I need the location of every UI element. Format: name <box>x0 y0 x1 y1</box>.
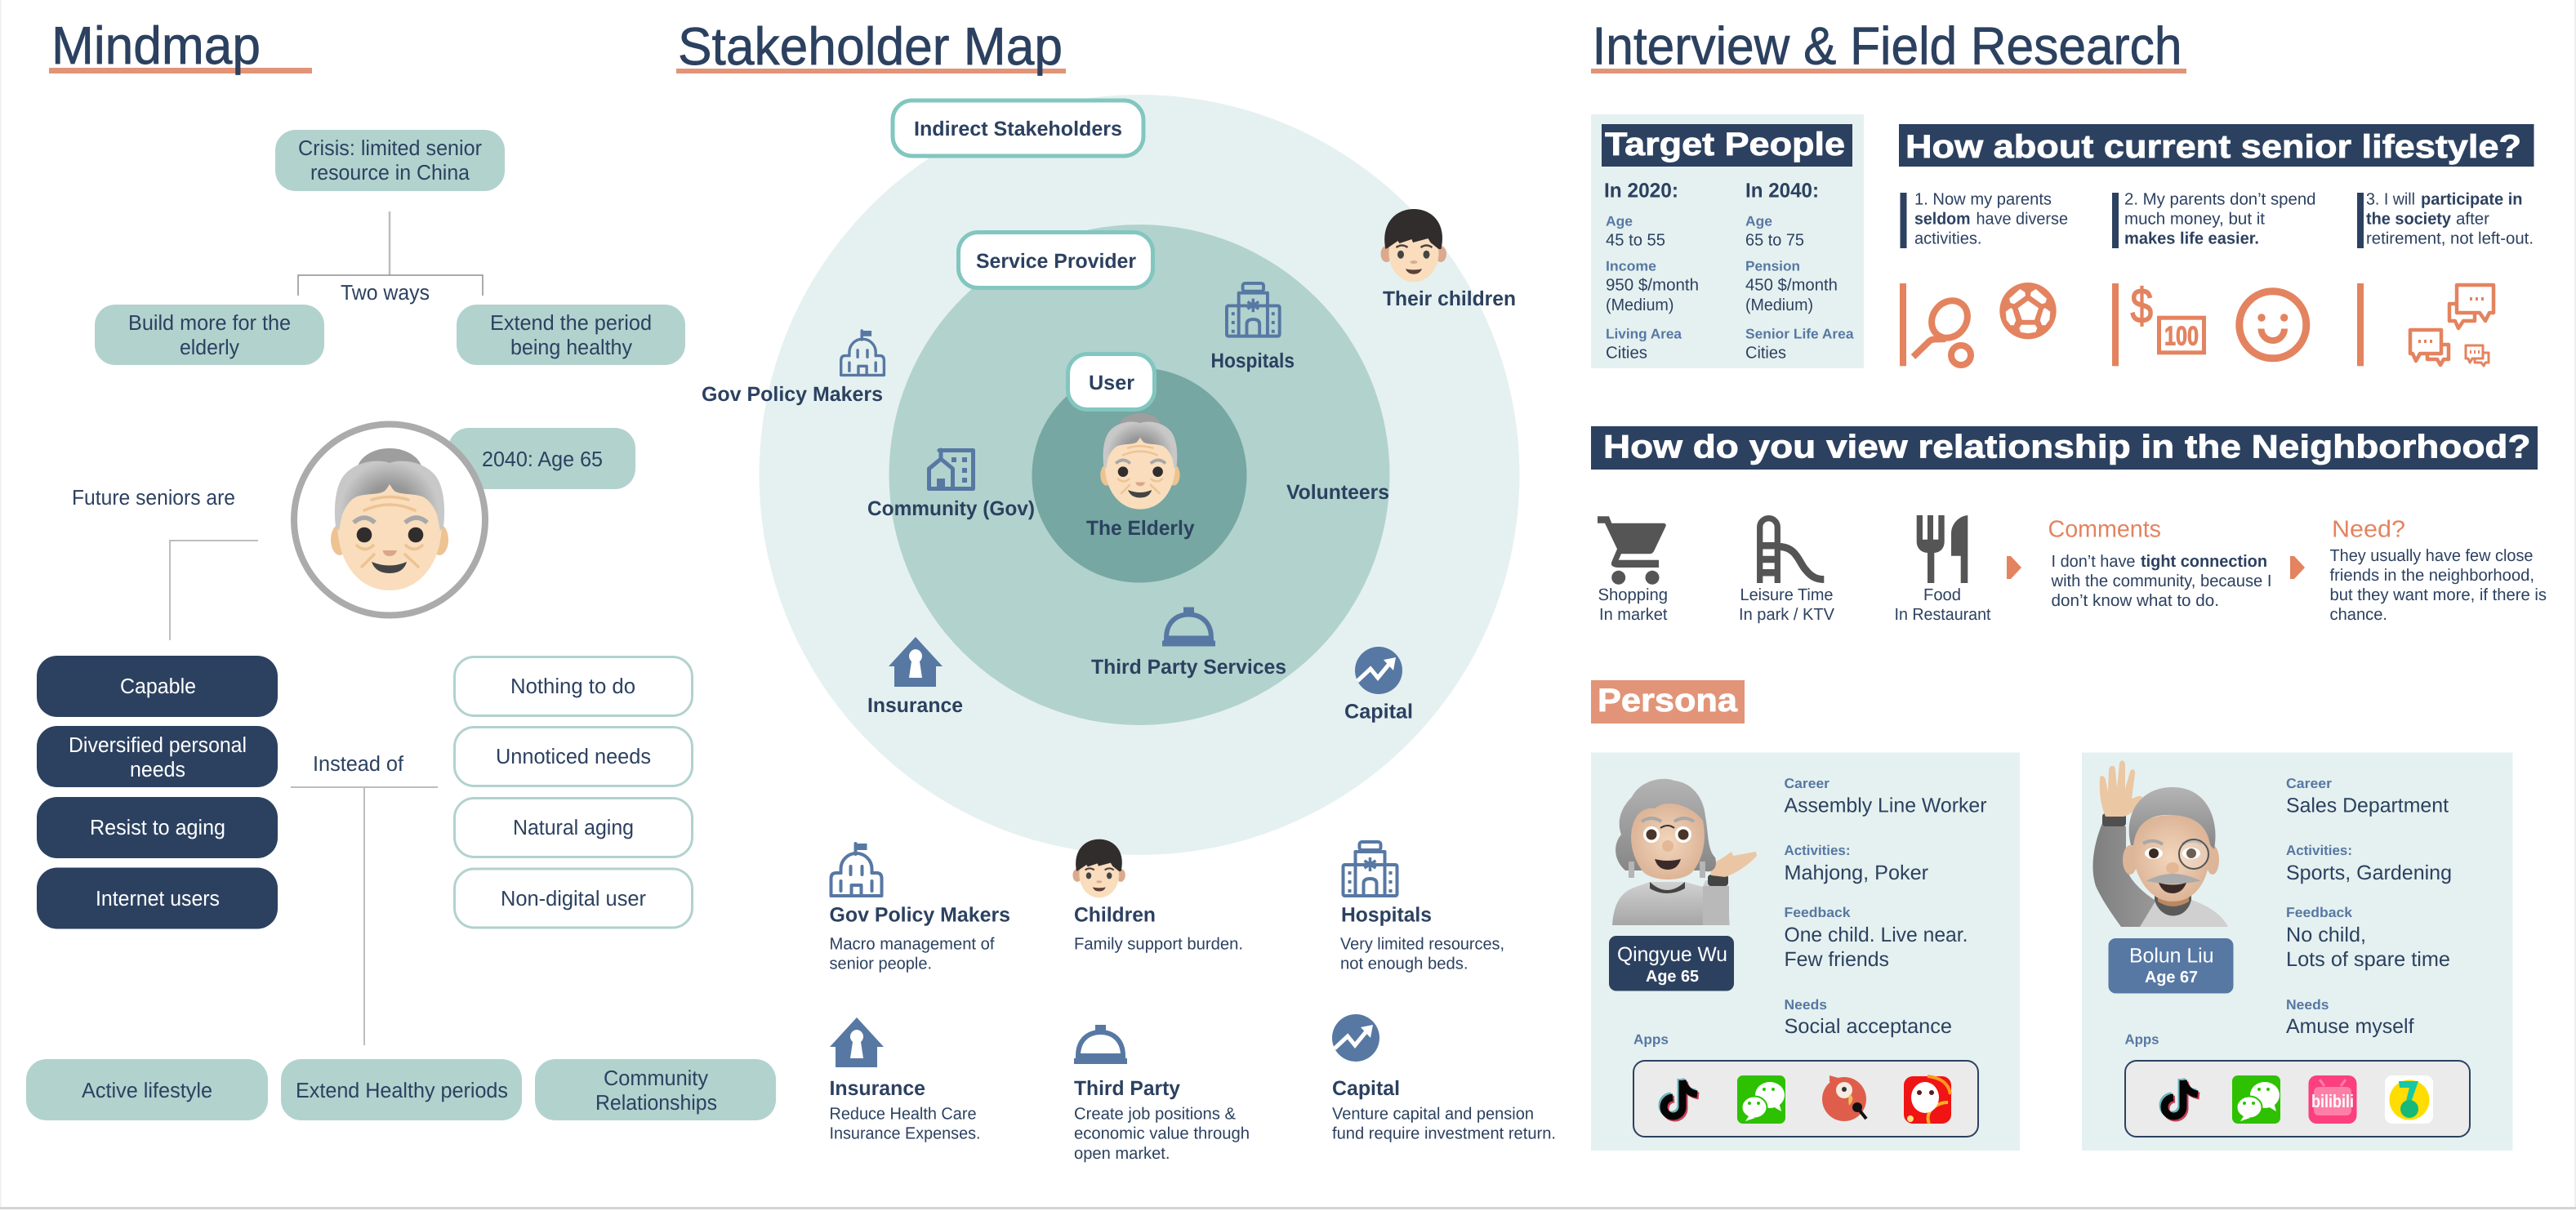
header: current senior lifestyle: How about current senior lifestyle? <box>1905 129 2521 165</box>
legend: capital <box>1332 1014 1556 1143</box>
stereotype: non-digital user: Non-digital user <box>501 886 646 910</box>
node: active lifestyle: Active lifestyle <box>82 1078 212 1102</box>
profile details: Career <box>1784 776 1829 791</box>
need block: but they want more, if there is <box>2329 585 2547 604</box>
trait: internet users <box>37 867 278 929</box>
comments block: Comments <box>2048 516 2161 542</box>
icon: singing app <box>1822 1075 1866 1121</box>
trait: diversified needs <box>37 726 278 787</box>
persona card: Bolun Liu <box>2082 753 2512 1151</box>
stereotype: unnoticed needs: Unnoticed needs <box>496 744 651 768</box>
quote 3: participate in <box>2421 189 2522 209</box>
column: in 2040: 450 $/month <box>1745 276 1838 294</box>
node: extend the period: Extend the period <box>490 310 652 335</box>
legend: insurance: Reduce Health Care <box>830 1104 977 1124</box>
profile details: Lots of spare time <box>2286 948 2450 971</box>
profile details <box>2286 776 2452 1038</box>
legend: hospitals: not enough beds. <box>1340 954 1468 973</box>
legend: children: Children <box>1074 903 1156 926</box>
column: in 2040: Pension <box>1745 258 1800 274</box>
profile details: Feedback <box>2286 905 2353 920</box>
legend: gov policy makers: senior people. <box>830 954 932 973</box>
node: crisis: resource in China <box>310 160 470 185</box>
need block: They usually have few close <box>2329 546 2534 565</box>
comments block: I don’t have <box>2052 552 2135 571</box>
quote 3 <box>2357 189 2534 248</box>
quote 2: much money, but it <box>2124 209 2265 229</box>
activity: shopping: In market <box>1599 605 1668 624</box>
stereotype: natural aging <box>454 799 693 857</box>
profile details: Feedback <box>1784 905 1851 920</box>
quote 2 <box>2112 189 2316 248</box>
activity: food: Food <box>1923 585 1961 604</box>
connector: two ways bracket <box>298 211 483 296</box>
profile details: Social acceptance <box>1784 1015 1952 1038</box>
legend: third party: Third Party <box>1074 1077 1180 1100</box>
column: in 2020: Age <box>1606 214 1633 229</box>
legend: gov policy makers: Macro management of <box>830 934 995 954</box>
header: persona <box>1591 680 1745 723</box>
node: extend healthy periods: Extend Healthy periods <box>296 1078 508 1102</box>
node: build more: elderly <box>180 335 239 359</box>
label: future seniors: Future seniors are <box>72 485 235 510</box>
profile details: Assembly Line Worker <box>1784 794 1986 817</box>
node: extend healthy periods <box>281 1059 522 1120</box>
name tag: Bolun Liu: Bolun Liu <box>2129 944 2213 967</box>
icons: money and smile: $ <box>2130 278 2153 333</box>
icons: racket and soccer ball <box>1900 283 2057 366</box>
need block: chance. <box>2329 605 2387 624</box>
tag: user: User <box>1089 372 1134 394</box>
column: in 2020: 950 $/month <box>1606 276 1699 294</box>
profile details: Sales Department <box>2286 794 2449 817</box>
column: in 2020: Living Area <box>1606 327 1682 341</box>
legend: insurance: Insurance Expenses. <box>830 1124 980 1143</box>
node: community relationships: Relationships <box>595 1090 717 1115</box>
profile details: Needs <box>2286 997 2329 1013</box>
profile details: Needs <box>1784 997 1827 1013</box>
user: the elderly <box>1086 413 1195 540</box>
tag: indirect stakeholders: Indirect Stakeholders <box>914 118 1122 140</box>
node: build more: Build more for the <box>128 310 291 335</box>
column: in 2040: 65 to 75 <box>1745 230 1804 250</box>
node: active lifestyle <box>26 1059 268 1120</box>
icon: bilibili <box>2308 1075 2357 1124</box>
stakeholder: capital: Capital <box>1344 701 1413 723</box>
heading: stakeholder map: Stakeholder Map <box>678 16 1063 76</box>
profile details: One child. Live near. <box>1784 924 1968 946</box>
legend: capital: Capital <box>1332 1077 1400 1100</box>
quote 2: makes life easier. <box>2124 229 2259 248</box>
node: extend the period <box>457 305 685 365</box>
trait: diversified needs: Diversified personal <box>69 732 247 757</box>
column: in 2040: (Medium) <box>1745 296 1813 314</box>
profile details: Mahjong, Poker <box>1784 862 1928 884</box>
list: stereotypes <box>454 657 693 928</box>
activity: leisure <box>1739 519 1834 624</box>
stakeholder: gov policy makers <box>702 331 884 406</box>
trait: capable: Capable <box>120 674 196 698</box>
node: crisis: Crisis: limited senior <box>298 136 482 160</box>
icon: bilibili: bilibili <box>2311 1091 2354 1111</box>
need block: friends in the neighborhood, <box>2329 566 2534 585</box>
panel: stakeholder map <box>676 16 1556 1163</box>
stakeholder: third party services <box>1091 608 1286 679</box>
trait: internet users: Internet users <box>96 886 220 910</box>
user: the elderly: The Elderly <box>1086 517 1195 540</box>
activity: food <box>1895 515 1991 624</box>
column: in 2020: In 2020: <box>1604 180 1678 203</box>
column: in 2040: Senior Life Area <box>1745 327 1854 341</box>
profile details: Activities: <box>1784 843 1851 858</box>
stereotype: nothing to do: Nothing to do <box>510 674 635 698</box>
legend: insurance: Insurance <box>830 1077 925 1100</box>
icon: tiktok <box>1662 1079 1699 1118</box>
list: future senior traits <box>37 656 278 929</box>
profile details: Few friends <box>1784 948 1889 971</box>
activity: shopping: Shopping <box>1598 585 1668 604</box>
arrow <box>2007 556 2021 579</box>
legend: third party: Create job positions & <box>1074 1104 1236 1124</box>
legend: gov policy makers: Gov Policy Makers <box>830 903 1010 926</box>
legend: third party: economic value through <box>1074 1124 1250 1143</box>
legend: gov policy makers <box>830 844 1010 973</box>
stereotype: nothing to do <box>454 657 693 715</box>
quote 1 <box>1900 189 2068 248</box>
stakeholder: gov policy makers: Gov Policy Makers <box>702 383 883 406</box>
icons: chat bubbles <box>2357 283 2494 366</box>
stereotype: non-digital user <box>454 869 693 928</box>
icon: qq music <box>2385 1075 2433 1124</box>
stakeholder: their children: Their children <box>1383 287 1516 310</box>
stakeholder: their children <box>1380 209 1516 310</box>
icon: wechat <box>2232 1075 2280 1124</box>
legend: third party: open market. <box>1074 1144 1170 1163</box>
need block: Need? <box>2332 516 2405 542</box>
comments block <box>2048 516 2272 610</box>
column: in 2040: In 2040: <box>1745 180 1819 203</box>
label: apps: Apps <box>2125 1032 2159 1047</box>
stakeholder: hospitals <box>1210 283 1295 372</box>
legend: insurance <box>830 1017 980 1143</box>
persona card: Qingyue Wu <box>1591 753 2020 1151</box>
quote 3: retirement, not left-out. <box>2366 229 2534 248</box>
quote 3: 3. I will <box>2366 189 2415 209</box>
legend: children <box>1072 839 1243 954</box>
trait: resist to aging: Resist to aging <box>90 815 225 839</box>
profile details: Career <box>2286 776 2332 791</box>
label: two ways: Two ways <box>341 280 430 305</box>
legend: hospitals <box>1340 842 1504 973</box>
column: in 2020 <box>1604 180 1699 363</box>
node: community relationships <box>535 1059 776 1120</box>
name tag: Qingyue Wu <box>1609 936 1734 991</box>
legend: hospitals: Very limited resources, <box>1340 934 1504 954</box>
legend: capital: fund require investment return. <box>1332 1124 1556 1143</box>
tag: user <box>1068 354 1155 410</box>
node: 2040 age 65 <box>448 428 635 489</box>
avatar: man memoji <box>2092 760 2228 927</box>
connector: instead of <box>291 787 438 1045</box>
column: in 2020: Income <box>1606 258 1656 274</box>
app tray <box>1633 1061 1978 1137</box>
header: persona: Persona <box>1598 683 1738 719</box>
tag: indirect stakeholders <box>893 100 1143 156</box>
activity: leisure: Leisure Time <box>1740 585 1833 604</box>
app tray <box>2125 1061 2470 1137</box>
node: 2040 age 65: 2040: Age 65 <box>482 447 603 471</box>
icon: tiktok <box>2163 1079 2199 1118</box>
stereotype: natural aging: Natural aging <box>513 815 634 839</box>
stereotype: unnoticed needs <box>454 727 693 786</box>
avatar: elderly woman in ring <box>294 425 485 616</box>
quote 1: 1. Now my parents <box>1914 189 2052 209</box>
column: in 2040 <box>1745 180 1854 363</box>
node: build more <box>95 305 324 365</box>
icons: money and smile: 100 <box>2164 320 2199 351</box>
profile details: Activities: <box>2286 843 2352 858</box>
stakeholder: community: Community (Gov) <box>867 497 1035 520</box>
profile details: Amuse myself <box>2286 1015 2414 1038</box>
node: extend the period: being healthy <box>510 335 632 359</box>
legend: hospitals: Hospitals <box>1341 903 1432 926</box>
tag: service provider: Service Provider <box>976 250 1136 273</box>
column: in 2020: (Medium) <box>1606 296 1674 314</box>
trait: capable <box>37 656 278 717</box>
node: community relationships: Community <box>604 1066 708 1090</box>
profile details: No child, <box>2286 924 2366 946</box>
column: in 2040: Age <box>1745 214 1772 229</box>
column: in 2020: Cities <box>1606 343 1647 363</box>
legend: children: Family support burden. <box>1074 934 1243 954</box>
node: crisis <box>275 130 505 191</box>
need block <box>2329 516 2547 624</box>
panel: target people <box>1591 114 1864 368</box>
activity: shopping <box>1598 516 1668 624</box>
connector: future seniors <box>170 541 258 640</box>
header: target people: Target People <box>1605 127 1845 163</box>
header: neighborhood relationship: How do you view relationship in the Neighborhood? <box>1603 430 2530 465</box>
stakeholder: capital <box>1344 647 1413 723</box>
name tag: Qingyue Wu: Qingyue Wu <box>1617 943 1727 966</box>
quote 2: 2. My parents don’t spend <box>2124 189 2316 209</box>
heading: interview and field research: Interview & Field Research <box>1593 16 2182 75</box>
icon: mascot app <box>1904 1076 1951 1124</box>
name tag: Qingyue Wu: Age 65 <box>1646 968 1699 986</box>
heading: Mindmap: Mindmap <box>51 16 261 75</box>
label: instead of: Instead of <box>313 751 404 776</box>
stakeholder: community <box>867 450 1035 520</box>
comments block: don’t know what to do. <box>2052 591 2219 610</box>
avatar: woman memoji <box>1612 779 1757 925</box>
activity: food: In Restaurant <box>1895 605 1991 624</box>
panel: interview and field research <box>1591 16 2547 1151</box>
legend: third party <box>1074 1025 1250 1163</box>
icons: money and smile <box>2112 278 2306 366</box>
icon: wechat <box>1737 1075 1785 1124</box>
name tag: Bolun Liu: Age 67 <box>2145 968 2198 986</box>
stakeholder: insurance: Insurance <box>867 694 963 717</box>
quote 1: have diverse <box>1977 209 2068 229</box>
comments block: tight connection <box>2141 552 2267 571</box>
legend: capital: Venture capital and pension <box>1332 1104 1534 1124</box>
name tag: Bolun Liu <box>2109 938 2233 993</box>
stakeholder: third party services: Third Party Services <box>1091 656 1286 679</box>
stakeholder: hospitals: Hospitals <box>1210 349 1295 372</box>
quote 1: seldom <box>1914 209 1970 229</box>
activity: leisure: In park / KTV <box>1739 605 1834 624</box>
panel: mindmap <box>26 16 776 1120</box>
arrow <box>2290 556 2305 579</box>
tag: service provider <box>959 232 1153 287</box>
comments block: with the community, because I <box>2051 572 2272 590</box>
column: in 2020: 45 to 55 <box>1606 230 1665 250</box>
quote 3: after <box>2456 209 2489 229</box>
label: apps: Apps <box>1633 1032 1669 1047</box>
trait: resist to aging <box>37 797 278 858</box>
stakeholder: insurance <box>867 637 963 717</box>
profile details: Sports, Gardening <box>2286 862 2452 884</box>
quote 3: the society <box>2366 209 2452 229</box>
trait: diversified needs: needs <box>130 757 185 781</box>
column: in 2040: Cities <box>1745 343 1786 363</box>
quote 1: activities. <box>1914 229 1981 248</box>
profile details <box>1784 776 1986 1038</box>
stakeholder: volunteers: Volunteers <box>1286 481 1389 504</box>
diagram: concentric circles <box>760 95 1519 855</box>
